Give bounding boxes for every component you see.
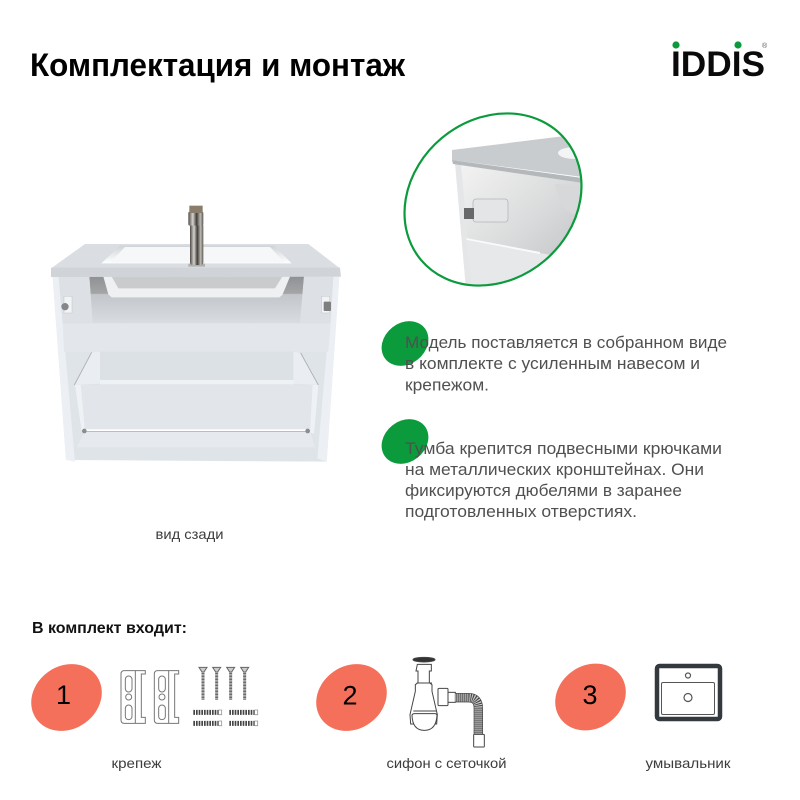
faucet <box>188 264 205 267</box>
number blob 2: 2 <box>342 680 358 710</box>
illustration: cabinet rear view <box>51 206 341 462</box>
number blob 3: 3 <box>582 680 598 710</box>
heading: kit contents: В комплект входит: <box>32 620 187 637</box>
logo: IDDIS: ® <box>762 42 768 50</box>
text block: mounting <box>405 440 722 521</box>
detail photo <box>452 136 580 284</box>
text block: mounting: на металлических кронштейнах. Они <box>405 461 704 479</box>
sink <box>101 246 292 263</box>
caption: rear view: вид сзади <box>156 526 224 542</box>
label: умывальник <box>646 755 731 771</box>
text block: assembled model: Модель поставляется в собранном виде <box>405 334 727 352</box>
detail: hanger callout <box>403 112 583 287</box>
bullet blob 1 <box>373 312 437 375</box>
label: сифон с сеточкой <box>386 755 506 771</box>
item 1: fasteners <box>18 650 258 771</box>
number blob 1: 1 <box>56 680 71 710</box>
text block: assembled model <box>405 334 727 394</box>
icon: brackets and screws <box>121 667 258 726</box>
text block: assembled model: крепежом. <box>405 376 489 394</box>
number blob 2 <box>303 650 400 745</box>
logo: IDDIS: IDDIS <box>671 45 765 84</box>
bullet blob 2 <box>373 410 437 473</box>
text block: assembled model: в комплекте с усиленным навесом и <box>405 355 700 373</box>
number blob 3 <box>542 650 639 744</box>
item 2: siphon <box>303 650 506 771</box>
upper rail <box>63 323 331 352</box>
text block: mounting: фиксируются дюбелями в заранее <box>405 482 682 500</box>
label: крепеж <box>112 755 162 771</box>
text block: mounting: подготовленных отверстиях. <box>405 503 637 521</box>
icon: siphon <box>410 657 484 747</box>
icon: basin top view <box>657 666 720 719</box>
item 3: basin <box>542 650 731 771</box>
number blob 1 <box>18 650 115 745</box>
title: Комплектация и монтаж <box>30 47 405 83</box>
countertop <box>51 244 340 268</box>
drawer <box>100 352 293 380</box>
hanger <box>473 199 508 222</box>
basin underside <box>103 277 290 297</box>
text block: mounting: Тумба крепится подвесными крючками <box>405 440 722 458</box>
cabinet body <box>53 277 339 462</box>
hangers <box>64 296 330 313</box>
